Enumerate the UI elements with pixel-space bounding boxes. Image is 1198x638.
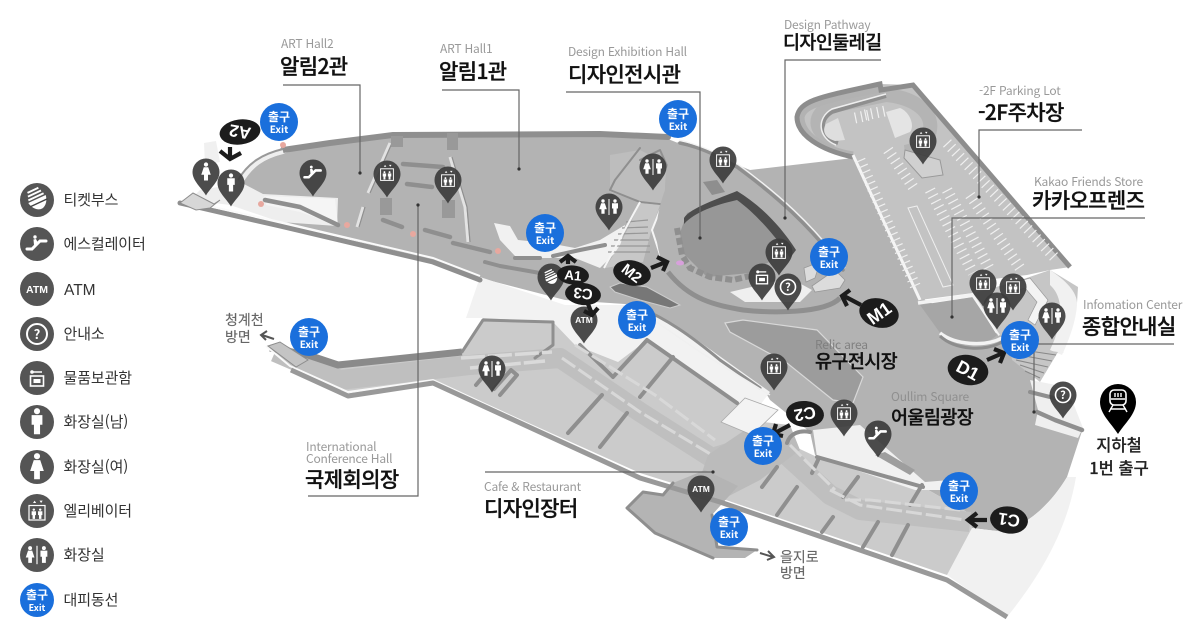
exit badge: 출구: [667, 105, 689, 122]
pin: elevator: [830, 400, 858, 436]
label: ART Hall 1: [439, 40, 507, 86]
pin: restroom: [984, 292, 1010, 330]
exit badge: 출구: [718, 513, 740, 530]
label: Kakao Friends Store: Kakao Friends Store: [1034, 173, 1143, 190]
exit badge: Exit: [1011, 339, 1030, 354]
floor: west ramp: [700, 425, 800, 498]
label: Relic area: Relic area: [815, 336, 868, 353]
badge: A1: [556, 264, 590, 286]
exit badge: [526, 214, 564, 252]
label: Cafe & Restaurant: 디자인장터: [484, 493, 578, 523]
label: ART Hall 1: 알림1관: [439, 56, 507, 86]
exit badge: [260, 103, 298, 141]
legend item: men's restroom: [20, 405, 128, 439]
exit badge: [618, 301, 656, 339]
leader line: Parking: [977, 130, 1082, 199]
pin: escalator: [300, 160, 326, 196]
pin: parking elevator: [910, 128, 936, 164]
pin: restroom: [1038, 302, 1066, 340]
label: Information center: [1082, 296, 1183, 341]
legend: [20, 183, 146, 617]
exit badge: Exit: [270, 121, 289, 136]
map: ground floor plan: [180, 84, 1083, 617]
legend item: evacuation route: 대피동선: [64, 589, 118, 610]
parking ramp ring: [817, 95, 930, 152]
badge: C2: C2: [793, 402, 817, 425]
label: Design Exhibition Hall: Design Exhibition Hall: [568, 43, 687, 60]
badge: M1: [856, 294, 902, 332]
label: ART Hall 2: 알림2관: [280, 51, 348, 81]
exit badge: 출구: [818, 243, 840, 260]
legend item: information: [20, 317, 105, 351]
leader line: ART Hall 2: [283, 85, 362, 175]
exit badge: Exit: [669, 118, 688, 133]
exit badge: [710, 508, 748, 546]
floor: central white platform: [466, 277, 770, 425]
label: Parking: [978, 82, 1064, 127]
arrow: C3: [584, 304, 598, 315]
floor: cafe block: [627, 470, 757, 558]
label: Cafe & Restaurant: [484, 478, 582, 523]
legend item: ATM: ATM: [26, 284, 48, 296]
west corridor stairs: [268, 342, 308, 367]
legend item: ATM: ATM: [64, 282, 96, 299]
direction: Euljiro: 방면: [780, 563, 806, 583]
exit badge: [659, 100, 697, 138]
exit badge: Exit: [628, 319, 647, 334]
pin: women's restroom: [192, 158, 220, 196]
walls: south shop block: [462, 320, 553, 358]
leader line: Pathway: [783, 60, 881, 220]
info desk structure: [1030, 380, 1083, 438]
legend item: evacuation route: [20, 583, 118, 617]
label: Information center: Infomation Center: [1083, 296, 1183, 313]
shop panels: [461, 352, 552, 368]
label: Kakao Friends Store: 카카오프렌즈: [1032, 185, 1145, 215]
badge: M2: M2: [618, 261, 645, 287]
red fire markers: [258, 142, 501, 254]
direction: Euljiro: 을지로: [780, 547, 819, 567]
legend item: restroom: 화장실: [64, 544, 105, 565]
stairs: north of hall: [703, 180, 725, 195]
relic area: [725, 320, 863, 403]
pin: information: [1050, 382, 1076, 418]
arrow: A2: [220, 147, 241, 159]
label: Oullim Square: Oullim Square: [891, 388, 970, 405]
exit badge: 출구: [752, 432, 774, 449]
west stairs: [180, 193, 220, 210]
legend item: restroom: [20, 538, 105, 572]
label: International Conference Hall: International: [306, 438, 376, 455]
textured planter: M2: [610, 283, 680, 308]
legend item: locker: [20, 361, 132, 395]
arrow: C1: [968, 513, 987, 527]
exit badge: Exit: [720, 526, 739, 541]
pin: restroom: [596, 194, 622, 230]
leader line: Exhibition hall: [566, 92, 702, 240]
white block near C2: [721, 398, 778, 435]
pin: restroom: [478, 356, 506, 392]
arrow: D1: [987, 349, 1004, 363]
label: International Conference Hall: [305, 438, 399, 494]
exit badge: [940, 472, 978, 510]
exit badge: 출구: [626, 306, 648, 323]
arrow: M2: [651, 257, 667, 271]
M1 entry blocks: [804, 262, 845, 292]
leader line: Cafe: [485, 470, 715, 474]
walls: design exhibition hall: [657, 142, 843, 312]
legend item: escalator: 에스컬레이터: [64, 233, 146, 254]
direction: Cheonggyecheon: [225, 310, 274, 347]
east wing: [973, 270, 1078, 353]
pin: ticket booth: [538, 264, 564, 300]
exit badge: [290, 318, 328, 356]
exit badge: Exit: [950, 490, 969, 505]
label: Oullim Square: [891, 388, 974, 430]
exit badge: [744, 427, 782, 465]
parking floor: [797, 84, 1070, 300]
arrow: C2: [773, 424, 790, 436]
pin: information: ?: [1060, 387, 1066, 403]
pin: elevator: [1000, 274, 1026, 310]
parking inner wall: [823, 96, 886, 143]
badge: A2: A2: [228, 120, 252, 143]
direction: Euljiro: [760, 547, 819, 583]
pin: ATM: [570, 306, 598, 344]
pit: design hall floor: [680, 195, 790, 277]
floor: main concourse: [235, 135, 1083, 532]
legend item: ticket booth: [20, 183, 119, 217]
exit badge: Exit: [754, 445, 773, 460]
arrow: A1: [560, 256, 576, 264]
legend item: ATM: [20, 272, 96, 306]
exit badge: [1001, 321, 1039, 359]
label: ART Hall 2: ART Hall2: [281, 35, 334, 52]
legend item: information: 안내소: [64, 323, 105, 344]
pin: information: ?: [785, 279, 791, 295]
exit badge: 출구: [298, 323, 320, 340]
pin: ATM: ATM: [692, 484, 710, 494]
floor: lower-right white plaza: [947, 477, 1076, 617]
parking core: [904, 150, 943, 178]
purple marker: [676, 260, 684, 266]
badge: D1: [945, 351, 991, 389]
parking stalls: [855, 111, 1057, 290]
leader line: Information center: [1032, 344, 1174, 414]
badge: D1: D1: [953, 356, 983, 385]
legend item: information: ?: [34, 324, 41, 343]
legend item: elevator: [20, 494, 132, 528]
direction: Cheonggyecheon: 방면: [225, 327, 251, 347]
label: ART Hall 2: [280, 35, 348, 81]
pin: elevator: [970, 270, 996, 306]
badge: C1: C1: [997, 509, 1021, 530]
white strip: Oullim south: [813, 425, 955, 490]
direction: Cheonggyecheon: 청계천: [225, 310, 264, 330]
badge: A2: [218, 117, 262, 147]
label: subway line 1 exit: [1089, 432, 1149, 479]
west white ledge: [190, 183, 338, 226]
exit badge: Exit: [820, 256, 839, 271]
label: International Conference Hall: Conference Hall: [306, 450, 392, 467]
floor: gate corridor: [275, 352, 970, 522]
pin: information: [774, 274, 802, 310]
legend item: evacuation route: Exit: [29, 601, 46, 614]
badge: C1: [988, 504, 1030, 536]
pin: men's restroom: [218, 170, 244, 206]
pin: elevator: [710, 146, 736, 184]
kakao friends pit: [920, 297, 997, 345]
legend item: locker: 물품보관함: [64, 367, 132, 388]
badge: C2: [785, 399, 825, 429]
walls: central curve: [640, 308, 760, 388]
label: Design Pathway: Design Pathway: [784, 16, 871, 33]
label: Cafe & Restaurant: Cafe & Restaurant: [484, 478, 582, 495]
legend item: elevator: 엘리베이터: [64, 500, 132, 521]
label: Relic area: [815, 336, 898, 374]
exit badge: 출구: [1009, 326, 1031, 343]
legend item: women's restroom: [20, 450, 128, 484]
exit badge: [810, 238, 848, 276]
floor: south shops and corridors: [270, 318, 972, 575]
badge: C3: C3: [573, 284, 594, 302]
pin: escalator: [864, 420, 892, 458]
label: Design Exhibition Hall: [568, 43, 687, 89]
leader line: ART Hall 1: [442, 90, 521, 171]
label: Design Exhibition Hall: 디자인전시관: [568, 59, 681, 89]
exit badge: Exit: [300, 336, 319, 351]
badge: M1: M1: [863, 298, 895, 329]
pin: restroom: [640, 154, 666, 190]
exit badge: Exit: [536, 232, 555, 247]
parking outer wall: [797, 84, 1070, 267]
pin: ATM: [688, 476, 714, 512]
label: Oullim Square: 어울림광장: [891, 404, 974, 430]
legend item: men's restroom: 화장실(남): [64, 411, 128, 432]
label: Parking: -2F주차장: [978, 97, 1064, 127]
leader line: Kakao: [950, 218, 1145, 319]
pin: elevator: [766, 238, 792, 276]
escalator Oullim: [875, 452, 915, 475]
label: International Conference Hall: 국제회의장: [305, 464, 399, 494]
exit badge: 출구: [534, 219, 556, 236]
label: subway line 1 exit: 지하철: [1096, 432, 1142, 456]
legend item: ticket booth: 티켓부스: [64, 189, 119, 210]
badge: C3: [564, 281, 602, 307]
exit badge: 출구: [268, 108, 290, 125]
badge: A1: A1: [564, 267, 583, 284]
badge: M2: [611, 257, 653, 289]
pin: subway exit: [1100, 384, 1136, 434]
legend item: escalator: [20, 227, 146, 261]
pin: elevator: [434, 166, 462, 204]
label: Information center: 종합안내실: [1082, 311, 1176, 341]
arrow: M1: [842, 290, 861, 306]
walls: corridor west: [270, 348, 462, 365]
label: Design Pathway: 디자인둘레길: [783, 29, 882, 55]
pin: elevator: [760, 354, 788, 390]
label: Parking: -2F Parking Lot: [979, 82, 1061, 99]
legend item: evacuation route: 출구: [26, 586, 48, 603]
walls: west hall: [283, 134, 668, 150]
pin: elevator: [374, 160, 400, 198]
stairs: information: [1010, 345, 1058, 382]
pin: locker: [748, 264, 776, 300]
label: Design Pathway: [783, 16, 882, 55]
leader line: Conference hall: [308, 203, 420, 496]
label: subway line 1 exit: 1번 출구: [1089, 455, 1149, 479]
pin: ATM: ATM: [575, 315, 593, 325]
legend item: women's restroom: 화장실(여): [64, 456, 128, 477]
walls: exit hall 1: [494, 223, 625, 268]
label: Relic area: 유구전시장: [815, 348, 898, 374]
walls: restrooms and stairs: [610, 150, 668, 205]
label: ART Hall 1: ART Hall1: [440, 40, 492, 57]
exit badge: 출구: [948, 477, 970, 494]
